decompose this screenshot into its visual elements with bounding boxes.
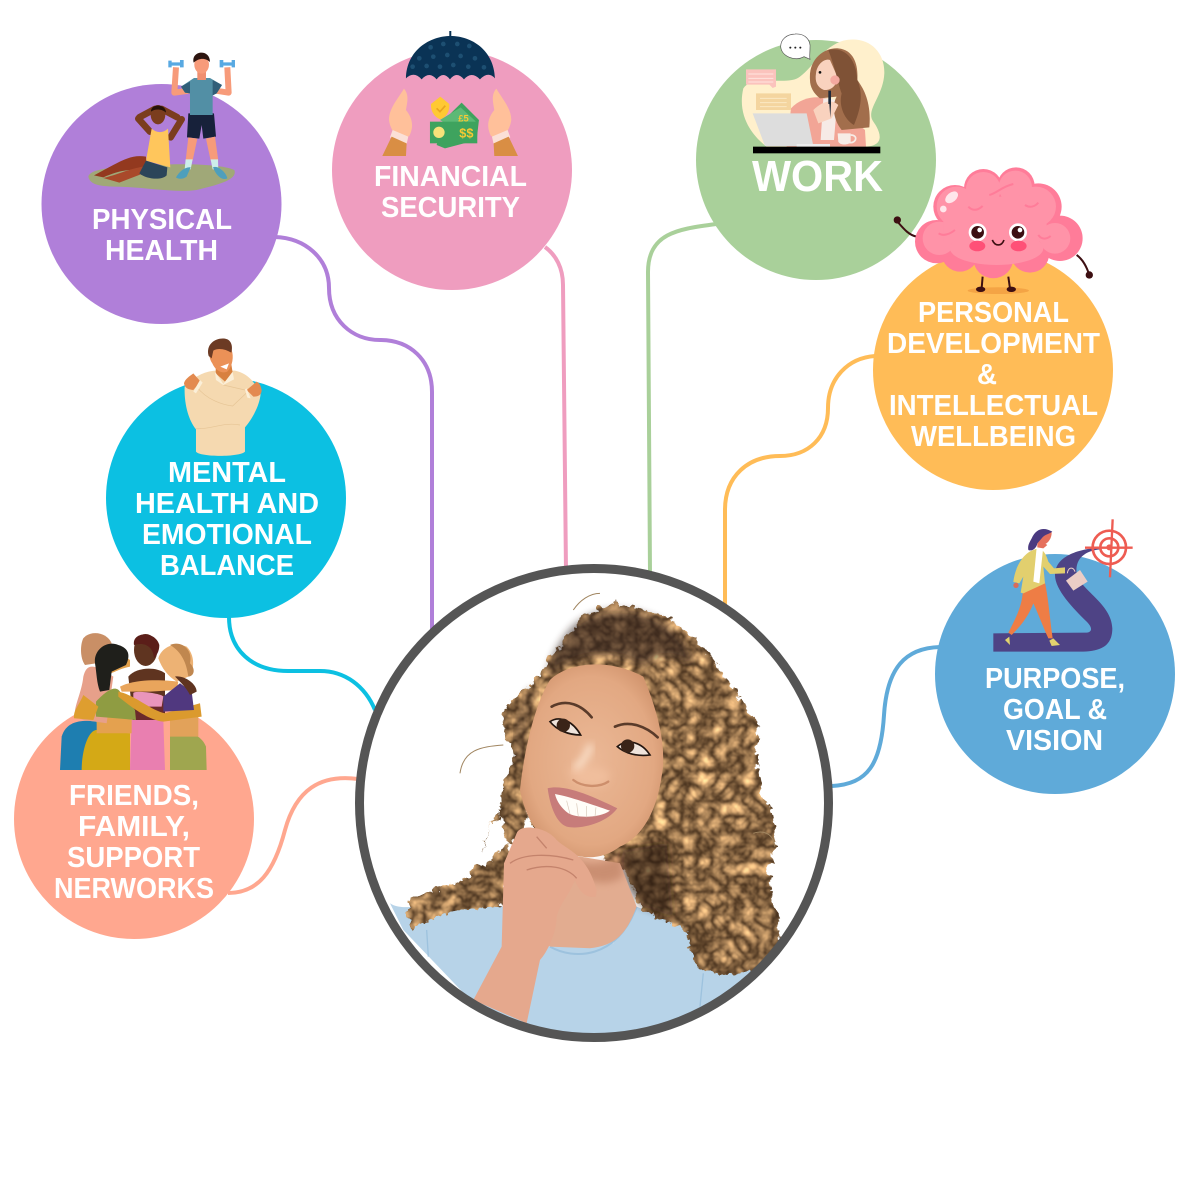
panel: mental health — [106, 338, 346, 618]
node circle: work — [696, 40, 936, 280]
heading: physical health — [92, 204, 232, 267]
connector: personal development — [725, 356, 875, 606]
connector: purpose — [832, 647, 940, 786]
photo backdrop — [359, 568, 829, 1038]
heading: mental health and emotional balance — [135, 457, 319, 582]
heading: friends family support networks: NERWORKS — [54, 873, 214, 905]
icon: umbrella, hands and money: $$ — [459, 126, 473, 140]
node circle: financial security — [332, 50, 572, 290]
heading: work: WORK — [752, 152, 883, 201]
icon: umbrella, hands and money — [382, 31, 518, 156]
icon: woman at laptop — [742, 34, 884, 153]
icon: cute brain — [894, 167, 1093, 294]
icon: group hug of friends — [60, 633, 207, 770]
heading: personal development and intellectual wellbeing: INTELLECTUAL — [889, 390, 1098, 422]
panel: friends and family — [14, 633, 254, 939]
node circle: purpose — [935, 554, 1175, 794]
connector: mental health — [229, 617, 375, 710]
photo: smiling woman thinking — [390, 593, 776, 1037]
panel: physical health — [42, 53, 282, 324]
photo frame ring — [360, 568, 828, 1038]
heading: personal development and intellectual wellbeing: PERSONAL — [918, 297, 1069, 329]
heading: purpose goal vision: VISION — [1006, 725, 1103, 757]
heading: friends family support networks: FRIENDS, — [69, 780, 199, 812]
connector: friends and family — [228, 778, 358, 893]
icon: man hugging himself — [184, 338, 262, 456]
heading: personal development and intellectual wellbeing: DEVELOPMENT — [887, 328, 1100, 360]
connector: work — [648, 224, 716, 574]
panel: work — [696, 34, 936, 280]
heading: financial security — [374, 161, 527, 224]
node circle: personal development — [873, 250, 1113, 490]
heading: personal development and intellectual wellbeing: & — [977, 359, 997, 391]
heading: purpose goal vision: PURPOSE, — [985, 663, 1125, 695]
heading: friends family support networks — [54, 780, 214, 905]
heading: personal development and intellectual wellbeing: WELLBEING — [911, 421, 1076, 453]
icon: exercising people — [88, 53, 235, 191]
connector: financial security — [545, 247, 566, 572]
icon: woman walking path to target — [993, 519, 1133, 652]
panel: purpose — [935, 519, 1175, 794]
heading: friends family support networks: SUPPORT — [67, 842, 200, 874]
heading: mental health and emotional balance: EMOTIONAL — [142, 519, 312, 551]
center portrait — [359, 568, 829, 1038]
heading: physical health: HEALTH — [105, 235, 218, 267]
heading: friends family support networks: FAMILY, — [78, 811, 190, 843]
node circle: physical health — [42, 84, 282, 324]
heading: financial security: FINANCIAL — [374, 161, 527, 193]
connector: physical health — [275, 237, 432, 632]
heading: mental health and emotional balance: HEALTH AND — [135, 488, 319, 520]
node circle: friends and family — [14, 699, 254, 939]
heading: purpose goal vision — [985, 663, 1125, 757]
heading: physical health: PHYSICAL — [92, 204, 232, 236]
icon: umbrella, hands and money: £5 — [458, 113, 469, 123]
panel: financial security — [332, 31, 572, 290]
panel: personal development — [873, 167, 1113, 490]
heading: mental health and emotional balance: BALANCE — [160, 550, 294, 582]
heading: purpose goal vision: GOAL & — [1003, 694, 1107, 726]
heading: mental health and emotional balance: MENTAL — [168, 457, 286, 489]
heading: financial security: SECURITY — [381, 192, 520, 224]
node circle: mental health — [106, 378, 346, 618]
heading: personal development and intellectual wellbeing — [887, 297, 1100, 453]
